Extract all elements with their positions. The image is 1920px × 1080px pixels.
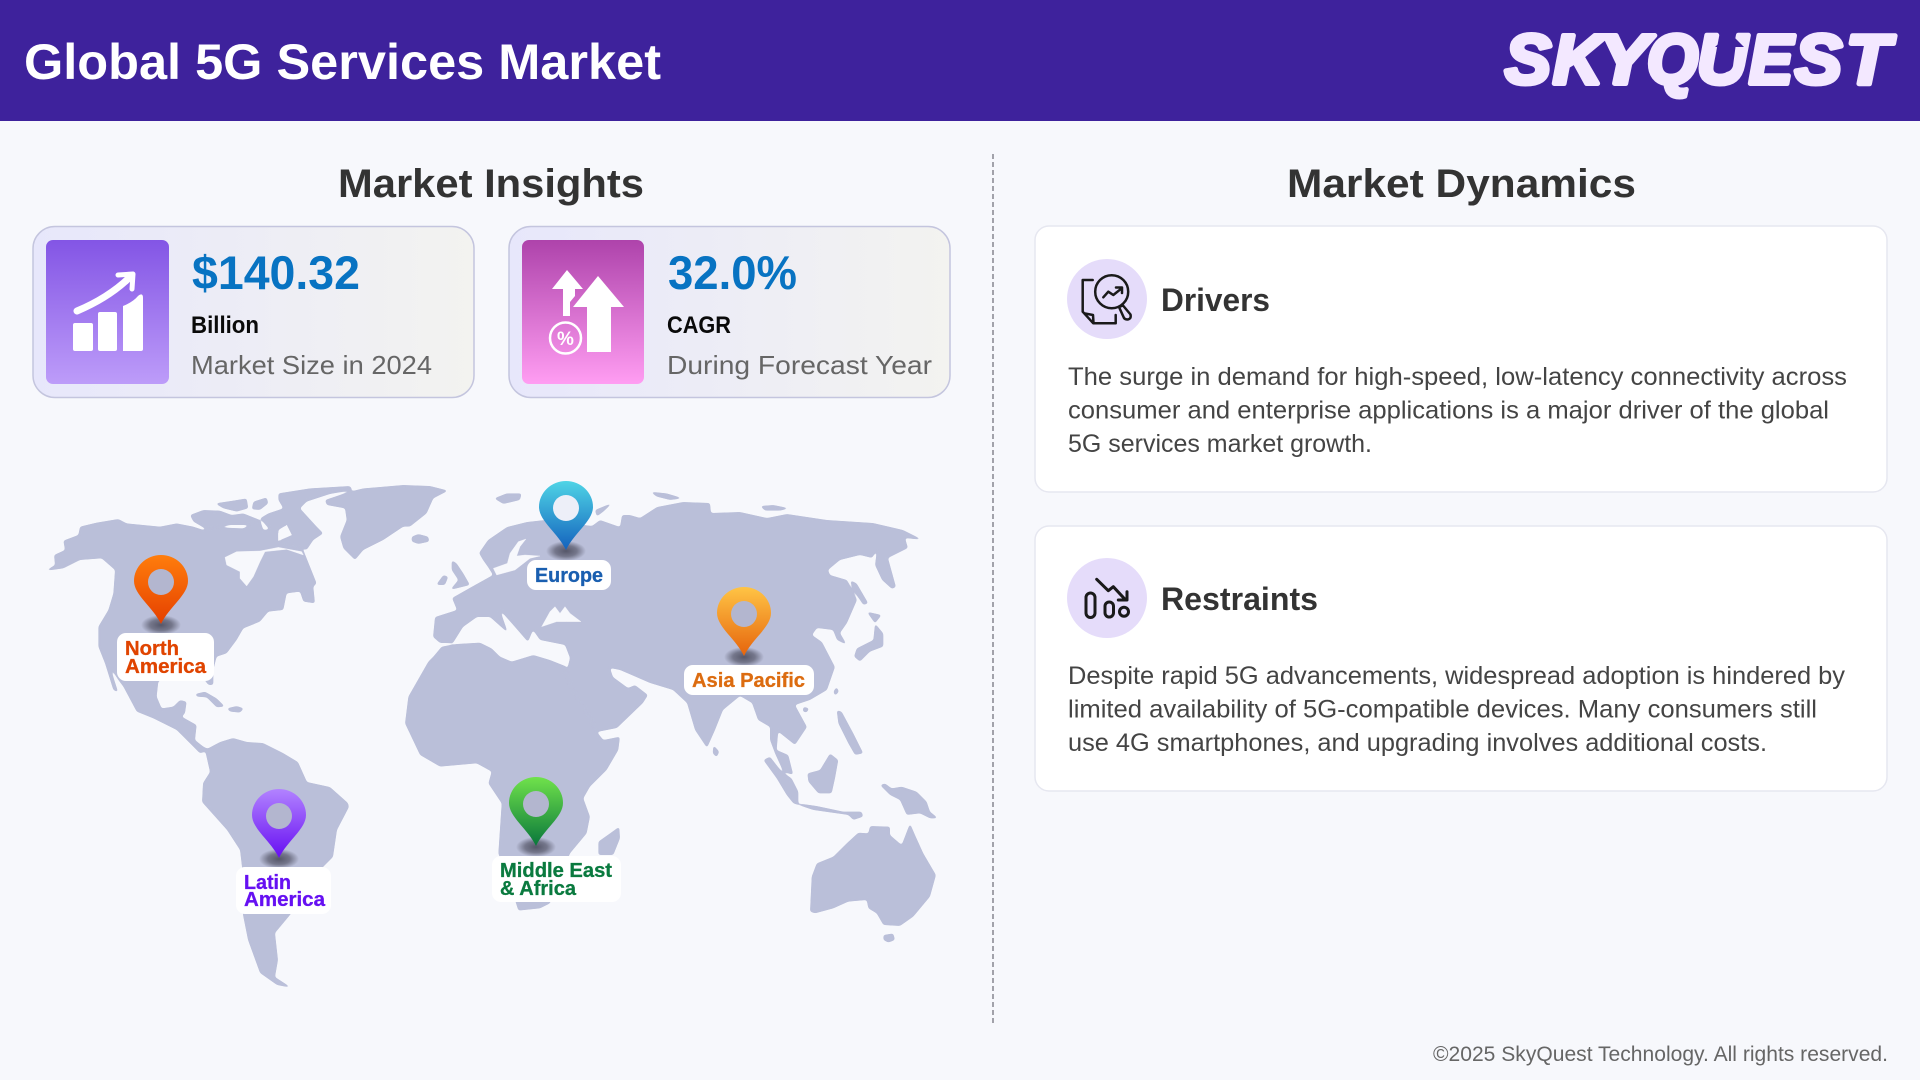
header banner bbox=[0, 0, 1920, 121]
pin: Middle East & Africa bbox=[509, 777, 563, 857]
panel: market size card bbox=[33, 226, 474, 398]
label: Middle East & Africa: Middle East bbox=[500, 860, 612, 882]
label: Billion: Billion bbox=[191, 312, 259, 339]
value: 32.0%: 32.0% bbox=[668, 246, 797, 299]
pin: Europe bbox=[539, 481, 593, 561]
text: drivers description: consumer and enterprise applications is a major driver of the global bbox=[1068, 396, 1829, 424]
panel: Drivers bbox=[1035, 226, 1887, 492]
label: Latin America bbox=[236, 867, 331, 914]
logo: SkyQuest: S bbox=[1795, 20, 1842, 98]
heading: Market Dynamics: Market Dynamics bbox=[1287, 162, 1636, 206]
label: Latin America: Latin bbox=[244, 872, 291, 894]
icon: up arrows with percent bbox=[522, 240, 644, 384]
label: Europe bbox=[527, 560, 611, 590]
icon: rising bar chart bbox=[46, 240, 169, 384]
text: restraints description: use 4G smartphones, and upgrading involves additional costs. bbox=[1068, 729, 1767, 757]
pin: North America bbox=[134, 555, 188, 635]
label: North America bbox=[117, 633, 214, 681]
text: restraints description: limited availability of 5G-compatible devices. Many consumers still bbox=[1068, 696, 1817, 724]
icon: report with magnifier bbox=[1067, 259, 1147, 339]
label: Asia Pacific bbox=[684, 665, 814, 695]
logo: SkyQuest: E bbox=[1749, 20, 1795, 98]
logo: SkyQuest: U bbox=[1697, 20, 1748, 98]
heading: Market Insights: Market Insights bbox=[338, 162, 644, 206]
world map bbox=[45, 485, 938, 988]
footer copyright: ©2025 SkyQuest Technology. All rights reserved. bbox=[1433, 1043, 1888, 1066]
caption: During Forecast Year: During Forecast Year bbox=[667, 350, 932, 380]
label: North America: North bbox=[125, 638, 179, 660]
label: Latin America: America bbox=[244, 889, 326, 911]
logo: SkyQuest: Y bbox=[1599, 20, 1655, 98]
pin: Asia Pacific bbox=[717, 587, 771, 667]
label: CAGR: CAGR bbox=[667, 312, 731, 339]
value: $140.32: $140.32 bbox=[192, 246, 360, 299]
label: North America: America bbox=[125, 656, 207, 678]
panel: CAGR card bbox=[509, 226, 950, 398]
caption: Market Size in 2024: Market Size in 2024 bbox=[191, 350, 432, 380]
text: restraints description: Despite rapid 5G advancements, widespread adoption is hindered by bbox=[1068, 662, 1846, 690]
label: Europe: Europe bbox=[535, 565, 603, 587]
pin: Latin America bbox=[252, 789, 306, 869]
logo: SkyQuest: Q bbox=[1647, 20, 1698, 98]
text: drivers description: 5G services market growth. bbox=[1068, 430, 1372, 458]
text: drivers description bbox=[1068, 363, 1847, 458]
title: Global 5G Services Market bbox=[24, 34, 661, 90]
heading: Drivers: Drivers bbox=[1161, 282, 1270, 318]
label: Middle East & Africa bbox=[492, 856, 621, 902]
logo: SkyQuest: S bbox=[1505, 20, 1551, 98]
logo: SkyQuest: T bbox=[1846, 20, 1895, 98]
label: Asia Pacific: Asia Pacific bbox=[692, 670, 805, 692]
panel: Restraints bbox=[1035, 526, 1887, 791]
logo: SkyQuest: K bbox=[1553, 20, 1607, 98]
logo: SkyQuest bbox=[1505, 20, 1895, 98]
icon: up arrows with percent: % bbox=[557, 329, 574, 350]
heading: Restraints: Restraints bbox=[1161, 581, 1318, 617]
text: restraints description bbox=[1068, 662, 1846, 757]
text: drivers description: The surge in demand for high-speed, low-latency connectivity across bbox=[1068, 363, 1847, 391]
label: Middle East & Africa: & Africa bbox=[500, 878, 577, 900]
icon: falling trend with bars bbox=[1067, 558, 1147, 638]
